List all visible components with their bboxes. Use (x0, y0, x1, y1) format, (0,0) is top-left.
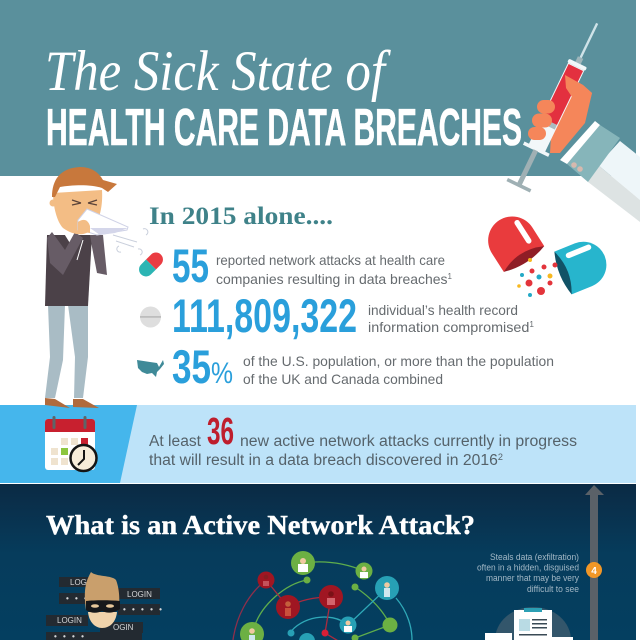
header band (0, 0, 636, 176)
callout: step 4: 4 (591, 566, 597, 577)
illustration: hacker with logins (46, 572, 164, 640)
illustration: sneezing man (45, 167, 148, 408)
illustration: hacker with logins: • • • • • (123, 605, 164, 614)
stat: 55 network attacks: 55 (172, 239, 209, 292)
right arm (90, 235, 107, 275)
callout: step 4: Steals data (exfiltration) (490, 552, 579, 562)
stat: 35 percent: % (211, 357, 233, 390)
icon: syringe (506, 17, 610, 193)
band: 36 active attacks (0, 405, 636, 483)
callout: step 4: difficult to see (527, 584, 579, 594)
arrow: step timeline (585, 485, 604, 640)
red nodes (258, 572, 343, 636)
callout: step 4: often in a hidden, disguised (477, 562, 579, 572)
stat: 35 percent: of the U.S. population, or more than the population (243, 353, 554, 369)
icon: tablet (140, 306, 161, 328)
illustration: hacker with logins: OGIN (113, 623, 134, 632)
tissue (78, 209, 128, 235)
stat: 111,809,322 records: 111,809,322 (172, 289, 357, 342)
shoes (45, 398, 99, 408)
icon: palm of hand (550, 75, 592, 153)
stat: 55 network attacks: 1 (448, 272, 453, 281)
title: The Sick State of (45, 40, 391, 103)
login boxes (46, 577, 160, 640)
illustration: hacker with logins: LOGIN (70, 578, 95, 587)
legs (45, 305, 88, 398)
illustration: hacker with logins: • • • (66, 594, 89, 603)
sleeve highlight (77, 240, 83, 260)
face (53, 190, 102, 234)
green nodes (240, 551, 398, 640)
stat: 55 network attacks: companies resulting in data breaches (216, 271, 448, 287)
stat: 55 network attacks: reported network attacks at health care (216, 252, 445, 268)
band: 36 active attacks: 2 (498, 452, 503, 462)
stat: 35 percent (137, 340, 554, 393)
callout: step 4: manner that may be very (486, 573, 580, 583)
stat: 111,809,322 records: information compromised (368, 319, 525, 335)
icon: calendar with clock (45, 416, 96, 471)
shirt collar (63, 232, 78, 248)
stat: 35 percent: 35 (172, 340, 211, 393)
callout: step 4 (477, 552, 602, 594)
teal nodes (288, 576, 399, 640)
staff figures (249, 558, 390, 640)
icon: fingers (528, 100, 555, 140)
icon: doctor sleeve (560, 121, 640, 222)
stat: 111,809,322 records: 1 (529, 320, 535, 329)
stat: 55 network attacks (136, 239, 453, 292)
band: 36 active attacks: 36 (207, 411, 234, 453)
head (85, 572, 119, 610)
hand (78, 220, 90, 233)
band: 36 active attacks: At least (149, 433, 202, 450)
illustration: hacker with logins: LOGIN (127, 590, 152, 599)
icon: thumb (565, 75, 592, 112)
left arm (47, 232, 83, 275)
hair (52, 167, 117, 197)
stat: 111,809,322 records: individual’s health record (368, 302, 518, 318)
icon: open capsule (479, 207, 613, 297)
icon: pill (136, 250, 166, 279)
band: 36 active attacks: that will result in a data breach discovered in 2016 (149, 452, 493, 469)
band: 36 active attacks: new active network attacks currently in progress (240, 433, 577, 450)
torso (45, 235, 92, 306)
mask (86, 600, 120, 613)
icon: US map (137, 360, 164, 377)
heading: what is an active network attack: What is an Active Network Attack? (46, 510, 475, 540)
illustration: hacker with logins: LOGIN (57, 616, 82, 625)
stat: 35 percent: of the UK and Canada combined (243, 371, 443, 387)
title (45, 40, 522, 157)
stat: 111,809,322 records (140, 289, 535, 342)
heading: in 2015 alone: In 2015 alone.... (149, 203, 333, 230)
sneeze swirls (113, 229, 148, 255)
panel: active network attack (0, 484, 636, 640)
links (233, 562, 412, 640)
diagram: network of staff (233, 551, 412, 640)
icon: documents (485, 607, 573, 640)
eyes (72, 200, 97, 205)
ear (50, 200, 56, 206)
